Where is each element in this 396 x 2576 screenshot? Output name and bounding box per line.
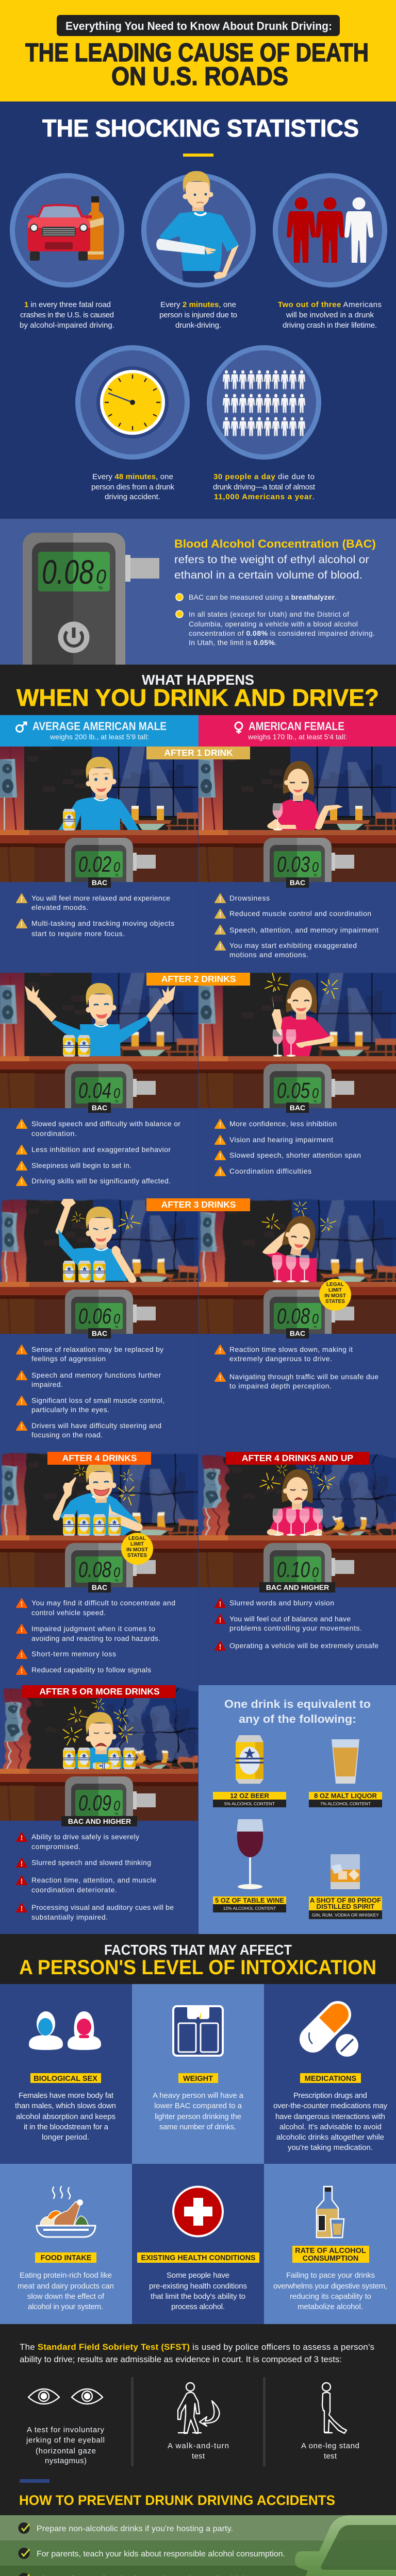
panel: rate of alcohol consumption [264,2164,396,2324]
callout: legal limit: IN MOST [126,1547,148,1553]
effects: male after 5 drinks: Processing visual and auditory cues will be [31,1903,174,1911]
BAC reading: % [314,1100,317,1104]
BAC reading: % [115,1326,118,1329]
icon: whisky glass [331,1854,360,1889]
panel: standard drink equivalents [199,1685,396,1934]
male column header [0,715,199,747]
effects: male after 3 drinks [16,1345,164,1439]
description: it in the bloodstream for a [24,2123,109,2131]
description: A heavy person will have a [153,2091,244,2100]
woman character slumped [260,1461,338,1536]
BAC tags row 4: BAC [92,1583,107,1591]
stat text: 48 minutes [91,472,174,501]
BAC tags row 1: BAC [290,878,305,887]
panel: sobriety test [0,2324,396,2515]
icon: two of three people [275,176,385,285]
effects: female after 3 drinks [215,1345,378,1390]
effects: male after 4 drinks: Short-term memory loss [31,1650,116,1658]
drinks heading: One drink is equivalent to [224,1698,371,1710]
scene: male after 2 drinks [0,973,198,1108]
BAC reading: 0.08 [78,1557,111,1582]
label: weight: WEIGHT [183,2075,213,2083]
male column header: weighs 200 lb., at least 5'9 tall: [50,733,149,741]
prevention heading: HOW TO PREVENT DRUNK DRIVING ACCIDENTS [19,2493,335,2508]
callout: legal limit: LIMIT [328,1287,342,1293]
effects: female after 3 drinks: to impaired depth perception. [229,1382,332,1390]
effects: male after 5 drinks: Slurred speech and slowed thinking [31,1858,151,1867]
label: weight [178,2073,218,2083]
description: metabolize alcohol. [298,2302,363,2311]
effects: male after 3 drinks: particularly in the eyes. [31,1405,109,1414]
man character pointing [53,1461,143,1536]
label: after 4 drinks: AFTER 4 DRINKS [62,1453,137,1463]
female column header: weighs 170 lb., at least 5'4 tall: [248,733,347,741]
scene: female after 2 drinks [199,973,396,1108]
effects: female after 2 drinks: Slowed speech, shorter attention span [229,1151,361,1159]
woman character finger raised [265,973,344,1057]
BAC reading: 0.04 [78,1078,111,1103]
effects: female after 2 drinks [215,1120,361,1176]
BAC tags row 1 [88,877,309,888]
bullet: legal limits: In Utah, the limit is 0.05%. [189,638,277,647]
panel: biological sex [0,1984,132,2164]
effects: male after 4 drinks: Reduced capability to follow signals [31,1666,151,1674]
icon: male and female heads [29,2011,101,2050]
icon: medical cross [173,2187,223,2236]
text: walk and turn [168,2442,229,2461]
SFST intro text: ability to drive; results are admissible as evidence in court. It is composed of 3 tests: [20,2354,342,2364]
description: pre-existing health conditions [149,2282,247,2291]
description: Eating protein-rich food like [20,2271,112,2280]
callout: legal limit: STATES [325,1299,345,1304]
description: you're taking medication. [288,2143,373,2152]
section heading: factors [0,1934,396,1984]
icon: breathalyzer: 0 [96,566,106,588]
description: than males, which slows down [15,2102,116,2110]
stat text: 30 people: 30 people a day die due to [213,472,315,481]
effects: female after 2 drinks: More confidence, less inhibition [229,1120,337,1128]
effects: female after 1 drink: motions and emotions. [229,951,308,959]
stat text: 30 people [213,472,316,501]
stat text: two of three: will be involved in a drunk [286,311,374,319]
description: alcoholic drinks altogether while [276,2133,384,2142]
description: overwhelms your digestive system, [273,2282,387,2291]
BAC tag row 5: BAC AND HIGHER [68,1817,131,1825]
stat text: two of three: driving crash in their lifetime. [283,321,377,330]
effects: male after 5 drinks: Ability to drive safely is severely [31,1833,139,1841]
scene: male after 3 drinks [0,1198,198,1334]
BAC reading: 0 [113,859,120,875]
text: one leg stand: test [324,2452,337,2461]
statistics heading: THE SHOCKING STATISTICS [42,114,359,142]
bullet: breathalyzer: BAC can be measured using a breathalyzer. [189,593,337,601]
description: alcohol in your system. [28,2302,103,2311]
BAC reading: 0 [312,1311,319,1327]
description: Prescription drugs and [293,2091,367,2100]
bullet: legal limits [176,610,375,647]
panel: shocking statistics [0,101,396,519]
scene: male after 4 drinks [0,1452,198,1587]
effects: female after 4 drinks and up: You will feel out of balance and have [229,1615,351,1623]
icon: car and whisky bottle [12,176,122,285]
effects: female after 4 drinks and up: Slurred words and blurry vision [229,1599,334,1607]
description: longer period. [42,2133,89,2142]
BAC reading: 0 [312,1086,319,1101]
callout: legal limit [319,1279,351,1311]
effects: male after 3 drinks: impaired. [31,1380,63,1388]
panel: existing health conditions [132,2164,264,2324]
subtitle pill: Everything You Need to Know About Drunk Driving: [65,20,332,32]
stat text: two of three [278,300,382,330]
icon: bottle and glass [317,2187,344,2238]
effects: male after 2 drinks: Less inhibition and exaggerated behavior [31,1145,171,1154]
BAC reading: 0 [312,1565,319,1580]
BAC tags row 3: BAC [92,1329,107,1337]
label: 8 oz malt liquor: 7% ALCOHOL CONTENT [320,1801,371,1806]
panel: weight [132,1984,264,2164]
icon: clock [78,348,187,457]
BAC tags row 2: BAC [290,1104,305,1112]
label: after 3 drinks: AFTER 3 DRINKS [161,1199,236,1210]
effects: male after 5 drinks [16,1833,174,1921]
scene: female after 4 drinks and up [199,1452,396,1587]
callout: legal limit: LEGAL [326,1282,344,1287]
description: lower BAC compared to a [154,2102,242,2110]
man character fist raised [56,1199,140,1283]
icon: injured man with arm cast [144,171,253,285]
label: rate of alcohol consumption: RATE OF ALCOHOL [295,2247,366,2255]
label: after 4 drinks and up: AFTER 4 DRINKS AND UP [242,1453,353,1463]
text: gaze test: jerking of the eyeball [26,2436,105,2445]
callout: legal limit: LEGAL [128,1536,146,1541]
text: walk and turn: test [192,2452,205,2461]
man character arms raised [25,983,175,1057]
BAC reading: % [314,1579,317,1583]
label: medications: MEDICATIONS [305,2075,357,2083]
BAC tags row 3: BAC [290,1329,305,1337]
effects: male after 4 drinks: Impaired judgment when it comes to [31,1624,155,1633]
icon: male symbol [16,722,26,732]
stat text: two minutes: drunk-driving. [175,321,221,330]
label: 5 oz table wine: 12% ALCOHOL CONTENT [223,1906,276,1911]
drinks heading: any of the following: [239,1713,356,1725]
icon: breathalyzer: % [98,585,103,590]
label: 12 oz beer: 5% ALCOHOL CONTENT [224,1801,275,1806]
stat text: 48 minutes: person dies from a drunk [91,483,174,492]
scene: male after 5 or more drinks [0,1685,198,1821]
effects: female after 3 drinks: Navigating through traffic will be unsafe due [229,1372,378,1381]
description: alcohol absorption and keeps [16,2112,116,2121]
effects: male after 2 drinks: Slowed speech and difficulty with balance or [31,1120,180,1128]
label: 8 oz malt liquor: 8 OZ MALT LIQUOR [314,1792,377,1800]
BAC tag row 5 [61,1816,137,1826]
BAC reading: 0.06 [78,1304,111,1329]
effects: male after 4 drinks [16,1599,175,1674]
callout: legal limit: IN MOST [324,1293,346,1299]
callout: legal limit [121,1533,153,1565]
BAC heading text: refers to the weight of ethyl alcohol or [174,554,369,566]
effects: male after 1 drink: elevated moods. [31,903,88,911]
label: 8 oz malt liquor [309,1792,382,1807]
effects: female after 1 drink [215,894,378,959]
label: after 3 drinks [146,1198,250,1211]
icon: beer can [236,1735,263,1784]
female column header: AMERICAN FEMALE [249,720,344,733]
icon: car silhouette [295,2515,396,2576]
BAC reading: 0.10 [277,1557,310,1582]
text: gaze test: A test for involuntary [27,2426,104,2434]
drinks heading [224,1698,371,1725]
BAC reading: 0.09 [78,1791,111,1816]
label: shot of distilled spirit [309,1896,382,1919]
description [273,2271,387,2311]
description [273,2091,388,2152]
section heading: what happens [0,665,396,715]
main title [25,38,369,91]
icon: one-leg stand figure [322,2383,346,2433]
effects: female after 4 drinks and up [215,1599,378,1650]
section heading: what happens: WHAT HAPPENS [142,672,254,688]
label: biological sex: BIOLOGICAL SEX [34,2075,97,2083]
effects: male after 3 drinks: Sense of relaxation may be replaced by [31,1345,163,1353]
SFST intro text [20,2342,374,2364]
label: after 4 drinks [47,1452,151,1465]
label: after 1 drink [146,747,250,759]
section heading: what happens: WHEN YOU DRINK AND DRIVE? [16,684,379,711]
icon: thirty people [209,348,319,457]
description [15,2091,116,2142]
effects: male after 1 drink [16,894,174,938]
subtitle pill [57,15,340,36]
BAC reading: % [115,1579,118,1583]
icon: breathalyzer [23,533,159,665]
effects: male after 5 drinks: coordination deteriorate. [31,1886,117,1894]
effects: male after 4 drinks: You may find it difficult to concentrate and [31,1599,175,1607]
SFST intro text: The Standard Field Sobriety Test (SFST) is used by police officers to assess a person's [20,2342,374,2352]
effects: female after 1 drink: Speech, attention, and memory impairment [229,926,378,934]
stat text: 48 minutes: driving accident. [105,493,160,501]
label: after 5 or more drinks [22,1685,176,1698]
woman character [267,761,343,831]
BAC reading: 0.05 [277,1078,310,1103]
BAC reading: % [314,874,317,877]
female column header [199,715,396,747]
BAC tags row 3 [88,1328,309,1338]
BAC reading: 0.08 [277,1304,310,1329]
description: over-the-counter medications may [273,2102,388,2110]
stat text: two minutes: Every 2 minutes, one [160,300,236,309]
label: rate of alcohol consumption [292,2246,369,2263]
callout: legal limit: LIMIT [130,1541,144,1547]
effects: female after 2 drinks: Vision and hearing impairment [229,1136,333,1144]
icon: wine glass [237,1819,263,1889]
icon: walking figure with turn arrow [178,2383,219,2433]
BAC tags row 2: BAC [92,1104,107,1112]
description: process alcohol. [171,2302,225,2311]
BAC reading: % [115,1100,118,1104]
stat text: two minutes [159,300,237,330]
stat text: one in three: by alcohol-impaired driving. [20,321,114,330]
BAC reading: 0 [113,1086,120,1101]
check item 3 [19,2573,253,2576]
text: walk and turn: A walk-and-turn [168,2442,229,2450]
BAC heading text: ethanol in a certain volume of blood. [174,569,362,581]
label: shot of distilled spirit: GIN, RUM, VODKA OR WHISKEY [312,1912,379,1918]
panel: medications [264,1984,396,2164]
text: gaze test: nystagmus) [45,2456,87,2465]
man character [58,757,139,831]
BAC reading: % [314,1326,317,1329]
effects: male after 4 drinks: control vehicle speed. [31,1608,106,1617]
BAC heading text [174,537,376,581]
check item 2: For parents, teach your kids about responsible alcohol consumption. [37,2550,285,2558]
BAC reading: 0 [113,1311,120,1327]
stat text: 30 people: 11,000 Americans a year. [214,493,315,501]
check item 1: Prepare non-alcoholic drinks if you're hosting a party. [37,2524,233,2533]
panel: food intake [0,2164,132,2324]
effects: male after 1 drink: start to require more focus. [31,929,125,938]
male column header: AVERAGE AMERICAN MALE [32,720,167,733]
stat text: 30 people: drunk driving—a total of almost [213,483,316,492]
icon: pills [294,1995,358,2058]
effects: male after 1 drink: You will feel more relaxed and experience [31,894,170,902]
description: Females have more body fat [19,2091,114,2100]
label: 12 oz beer: 12 OZ BEER [230,1792,270,1800]
label: rate of alcohol consumption: CONSUMPTION [303,2255,358,2263]
label: food intake [35,2252,96,2263]
description: reducing its capability to [290,2292,371,2301]
BAC reading: 0.03 [277,852,310,877]
effects: male after 3 drinks: Significant loss of small muscle control, [31,1396,164,1404]
label: 12 oz beer [213,1792,286,1807]
effects: male after 3 drinks: feelings of aggression [31,1354,106,1363]
description: lighter person drinking the [155,2112,241,2121]
effects: male after 3 drinks: Drivers will have difficulty steering and [31,1421,161,1430]
stat text: two minutes: person is injured due to [159,311,237,319]
man character slumped with cans [63,1698,136,1769]
stat text: 48 minutes: Every 48 minutes, one [92,472,173,481]
stat text: two of three: Two out of three Americans [278,300,382,309]
label: after 5 or more drinks: AFTER 5 OR MORE DRINKS [39,1686,160,1697]
BAC reading: 0 [113,1565,120,1580]
section heading: factors: FACTORS THAT MAY AFFECT [104,1942,292,1958]
description: meat and dairy products can [18,2282,114,2291]
woman character holding head [261,1197,338,1282]
BAC reading: 0 [312,859,319,875]
label: shot of distilled spirit: A SHOT OF 80 PROOF [310,1896,381,1904]
label: 5 oz table wine: 5 OZ OF TABLE WINE [215,1896,284,1904]
effects: male after 5 drinks: compromised. [31,1842,80,1851]
effects: female after 3 drinks: Reaction time slows down, making it [229,1345,353,1353]
effects: male after 5 drinks: substantially impaired. [31,1913,108,1921]
icon: breathalyzer: 0.08 [42,553,94,591]
description [18,2271,114,2311]
text: one leg stand [301,2442,359,2461]
effects: male after 2 drinks: Sleepiness will begin to set in. [31,1161,131,1170]
effects: female after 4 drinks and up: problems controlling your movements. [229,1624,362,1632]
effects: male after 2 drinks: coordination. [31,1129,77,1138]
label: shot of distilled spirit: DISTILLED SPIRIT [317,1903,374,1910]
main title: ON U.S. ROADS [111,62,288,91]
stat text: one in three: 1 in every three fatal road [24,300,111,309]
header panel [0,0,396,101]
description: same number of drinks. [159,2123,236,2131]
stat text: one in three [20,300,114,330]
description: alcohol. It's advisable to avoid [279,2123,382,2131]
effects: female after 2 drinks: Coordination difficulties [229,1167,311,1175]
icon: malt liquor glass [332,1739,359,1784]
BAC tags row 2 [88,1103,309,1113]
label: after 4 drinks and up [226,1452,369,1465]
effects: male after 1 drink: Multi-tasking and tracking moving objects [31,919,174,927]
label: after 2 drinks: AFTER 2 DRINKS [161,974,236,984]
label: existing health conditions: EXISTING HEALTH CONDITIONS [141,2254,256,2262]
bullet: legal limits: In all states (except for Utah) and the District of [189,610,349,618]
bullet: legal limits: concentration of 0.08% is considered impaired driving. [189,629,375,637]
icon: female symbol [235,722,242,734]
label: after 1 drink: AFTER 1 DRINK [164,748,233,758]
scene: female after 1 drink [199,747,396,882]
text: one leg stand: A one-leg stand [301,2442,359,2450]
BAC tags row 4: BAC AND HIGHER [266,1583,329,1591]
effects: male after 2 drinks: Driving skills will be significantly affected. [31,1177,171,1185]
panel: BAC definition [0,519,396,665]
icon: eyes [28,2389,103,2404]
effects: male after 4 drinks: avoiding and reacting to road hazards. [31,1634,160,1642]
effects: female after 1 drink: You may start exhibiting exaggerated [229,941,357,950]
text: gaze test [26,2426,105,2465]
text: gaze test: (horizontal gaze [36,2447,96,2455]
label: after 2 drinks [146,973,250,986]
effects: female after 3 drinks: extremely dangerous to drive. [229,1354,332,1363]
description: Failing to pace your drinks [286,2271,375,2280]
scene: female after 3 drinks [199,1197,396,1334]
callout: legal limit: STATES [127,1553,147,1558]
icon: scale [173,2006,223,2056]
description [153,2091,244,2131]
effects: male after 2 drinks [16,1120,180,1185]
description: have dangerous interactions with [275,2112,385,2121]
stat text: one in three: crashes in the U.S. is caused [20,311,114,319]
label: 5 oz table wine [213,1896,286,1912]
effects: male after 5 drinks: Reaction time, attention, and muscle [31,1876,156,1884]
label: food intake: FOOD INTAKE [41,2254,92,2262]
description: that limit the body's ability to [151,2292,245,2301]
description [149,2271,247,2311]
description: Some people have [167,2271,229,2280]
section heading: factors: A PERSON'S LEVEL OF INTOXICATION [19,1956,376,1979]
BAC heading text: Blood Alcohol Concentration (BAC) [174,537,376,550]
scene: male after 1 drink [0,747,198,882]
BAC reading: % [115,1812,118,1816]
effects: male after 3 drinks: focusing on the road. [31,1431,103,1439]
icon: food plate [37,2187,95,2237]
panel: prevention checklist [0,2515,396,2576]
BAC reading: % [115,874,118,877]
effects: female after 1 drink: Drowsiness [229,894,270,902]
bullet: legal limits: Columbia, operating a vehicle with a blood alcohol [189,620,358,628]
BAC tags row 4 [88,1582,335,1592]
BAC reading: 0.02 [78,852,111,877]
BAC tags row 1: BAC [92,878,107,887]
description: slow down the effect of [27,2292,105,2301]
BAC reading: 0 [113,1798,120,1814]
effects: male after 3 drinks: Speech and memory functions further [31,1371,161,1379]
effects: female after 4 drinks and up: Operating a vehicle will be extremely unsafe [229,1641,378,1650]
effects: female after 1 drink: Reduced muscle control and coordination [229,909,371,918]
